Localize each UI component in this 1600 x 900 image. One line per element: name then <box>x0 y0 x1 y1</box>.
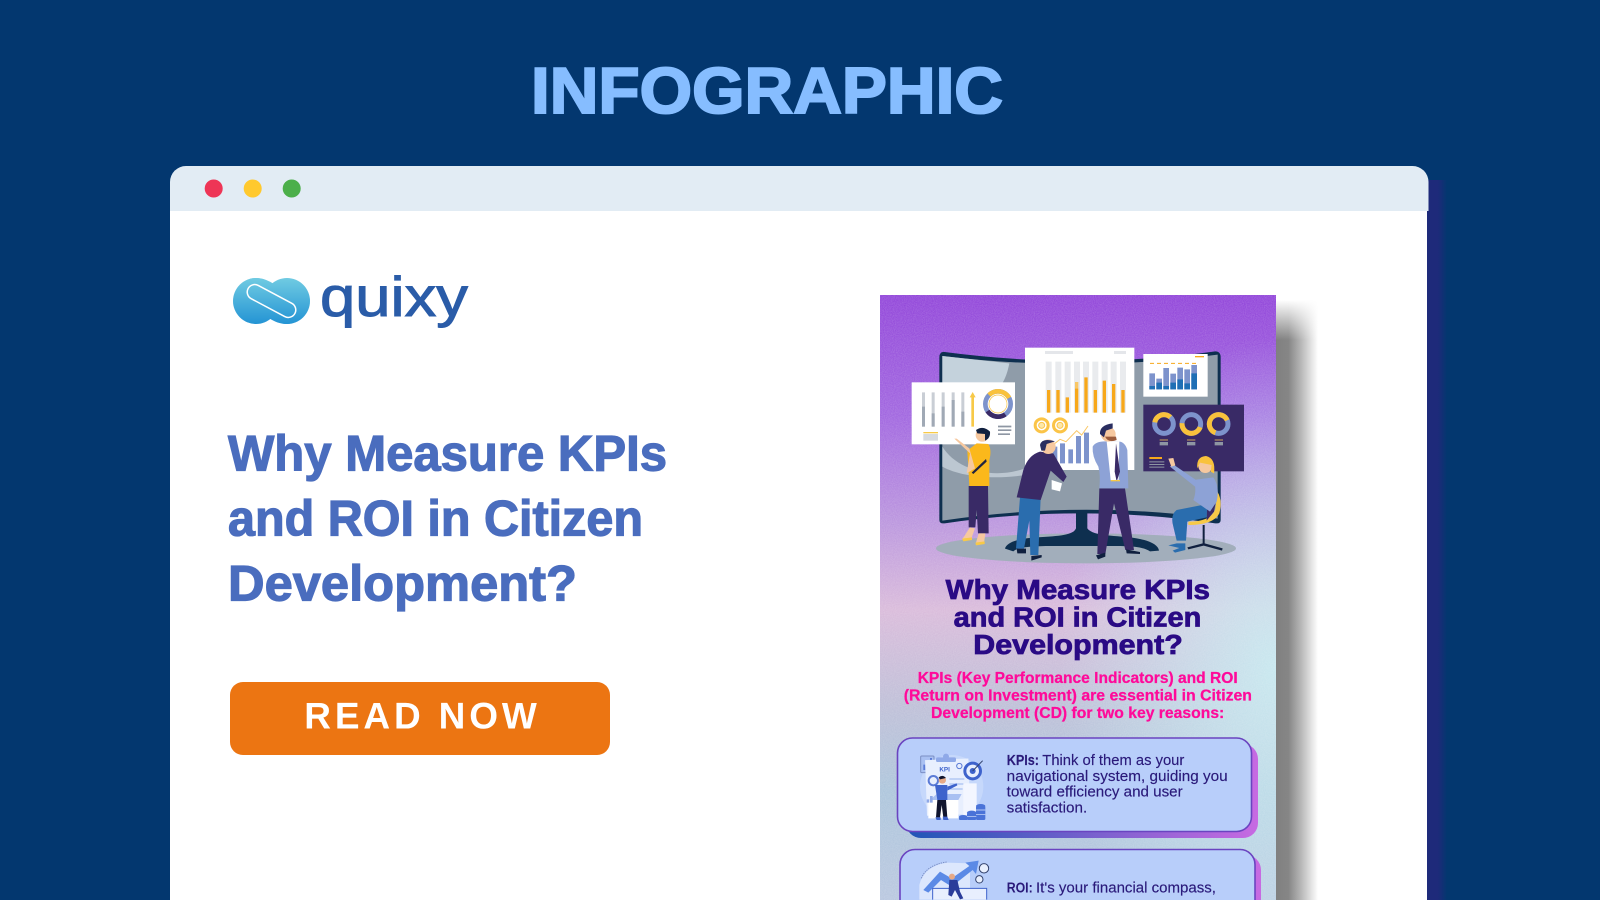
intro line 1: KPIs (Key Performance Indicators) and ROI <box>918 670 1238 687</box>
headline line 2: and ROI in Citizen <box>228 490 643 546</box>
ROI card text bold: ROI: <box>1007 881 1033 897</box>
ROI card text: It's your financial compass, <box>1036 881 1216 897</box>
chair <box>1188 492 1221 525</box>
infographic drop shadow <box>1276 300 1318 900</box>
person: woman in yellow <box>954 428 990 545</box>
headline <box>228 426 667 612</box>
panel background <box>880 295 1276 900</box>
monitor <box>939 351 1221 523</box>
logo: quixy <box>233 265 468 328</box>
panel teal wash <box>1100 357 1276 900</box>
card: KPIs <box>898 738 1258 838</box>
torso <box>1193 477 1218 512</box>
chart panel: dark right <box>1143 405 1244 471</box>
intro line 2: (Return on Investment) are essential in Citizen <box>904 688 1252 705</box>
infographic title line 3: Development? <box>973 629 1183 660</box>
infographic preview panel <box>880 295 1276 900</box>
infographic title line 2: and ROI in Citizen <box>954 602 1201 632</box>
card face <box>900 850 1255 900</box>
title: INFOGRAPHIC: INFOGRAPHIC <box>531 54 1003 127</box>
card shade <box>909 855 1261 900</box>
floor ellipse <box>936 533 1236 563</box>
browser window shadow <box>1427 180 1447 900</box>
monitor stand <box>1005 512 1159 551</box>
donut <box>985 391 1011 417</box>
icon: KPI clipboard <box>920 754 985 820</box>
button label: READ NOW <box>304 695 537 736</box>
browser window <box>170 166 1428 900</box>
window control: yellow dot <box>244 180 262 198</box>
card: ROI <box>900 850 1261 900</box>
chart panel: centre <box>1025 348 1134 470</box>
logo wordmark: quixy <box>320 265 468 328</box>
person: man from behind <box>1016 439 1067 561</box>
card text <box>1007 753 1228 816</box>
grey columns <box>1046 362 1126 413</box>
headline line 1: Why Measure KPIs <box>228 426 667 482</box>
card text line 1 bold: KPIs: <box>1007 753 1039 769</box>
card text line 1: Think of them as your <box>1042 753 1184 769</box>
card text line 4: satisfaction. <box>1007 800 1087 816</box>
card face <box>898 738 1252 832</box>
window title bar <box>170 166 1428 211</box>
chart panel: top right <box>1143 354 1208 397</box>
small donuts <box>1035 419 1066 432</box>
monitor reflection <box>942 356 1010 382</box>
window body <box>170 211 1427 900</box>
infographic title <box>946 574 1210 660</box>
monitor reflection lower <box>942 447 1025 477</box>
button: read now <box>230 682 610 755</box>
window control: red dot <box>205 180 223 198</box>
logo symbol <box>233 278 310 324</box>
card text line 3: toward efficiency and user <box>1007 785 1183 801</box>
icon: ROI growth <box>919 861 989 900</box>
monitor screen <box>942 355 1218 521</box>
orange columns <box>1047 377 1125 413</box>
person: seated woman <box>1168 456 1223 553</box>
person: standing man <box>1093 423 1140 559</box>
small bars <box>1053 433 1089 463</box>
window control: green dot <box>283 180 301 198</box>
chart panel: left <box>912 382 1016 444</box>
legs <box>1172 504 1207 541</box>
intro line 3: Development (CD) for two key reasons: <box>931 705 1224 722</box>
panel grain <box>880 295 1276 900</box>
headline line 3: Development? <box>228 556 577 612</box>
card shade <box>906 744 1258 838</box>
illustration: team analysing dashboards <box>912 348 1244 563</box>
card text line 2: navigational system, guiding you <box>1007 769 1228 785</box>
infographic title line 1: Why Measure KPIs <box>946 574 1210 605</box>
icon: KPI clipboard: KPI <box>939 767 950 774</box>
yellow arrow <box>970 392 976 427</box>
trend line <box>1054 426 1088 444</box>
intro text <box>904 670 1252 722</box>
